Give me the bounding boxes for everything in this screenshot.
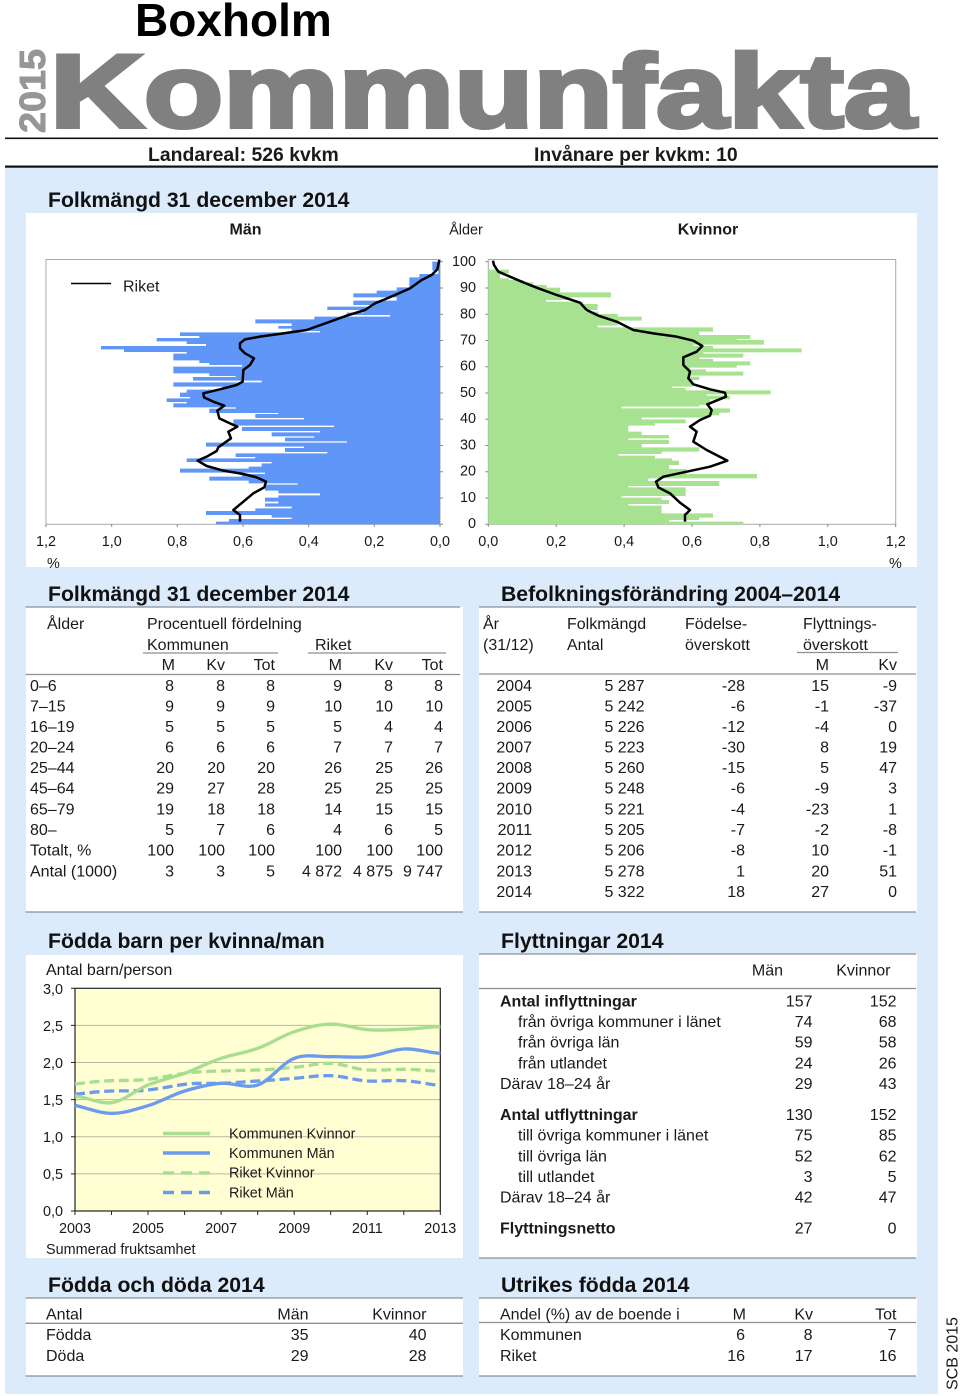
- table rows: -30: [722, 740, 745, 756]
- legend: Riket Kvinnor: [229, 1166, 315, 1182]
- panel: foreign born table: 6: [736, 1327, 745, 1344]
- age axis labels: 80: [460, 306, 476, 322]
- table rows: 4 875: [353, 864, 393, 880]
- table header: Födelse-: [685, 616, 747, 633]
- y axis labels: 1,0: [43, 1130, 63, 1146]
- table header: (31/12): [483, 637, 534, 654]
- chart: women bars: [485, 260, 896, 527]
- x axis labels: 2005: [132, 1221, 164, 1237]
- moves out: Antal utflyttningar: [500, 1107, 638, 1124]
- moves in: 152: [870, 994, 897, 1010]
- moves in: 43: [879, 1076, 897, 1093]
- header rule bottom: [5, 166, 938, 168]
- women axis labels: 0,8: [750, 534, 770, 550]
- moves in: från utlandet: [518, 1054, 608, 1072]
- table rows: 7: [434, 740, 443, 756]
- x axis labels: 2007: [205, 1221, 237, 1237]
- table header: [47, 614, 444, 674]
- moves in: 24: [795, 1056, 813, 1072]
- moves out: 75: [795, 1128, 813, 1144]
- table rows: -12: [722, 719, 745, 736]
- panel: population change table: [479, 607, 917, 912]
- heading: births and deaths: Födda och döda 2014: [48, 1274, 265, 1297]
- table rows: 8: [384, 678, 393, 695]
- table rows: 4 872: [302, 864, 342, 880]
- table rows: 5: [820, 760, 829, 777]
- legend: Kommunen Kvinnor: [229, 1126, 356, 1142]
- table rows: 5: [434, 822, 443, 839]
- women axis labels: 0,0: [478, 534, 498, 550]
- table rows: -9: [883, 678, 897, 695]
- table rows: 5 278: [604, 864, 645, 880]
- panel: births and deaths table: Män: [277, 1306, 308, 1324]
- x axis labels: 2003: [59, 1221, 91, 1237]
- table rows: -28: [722, 678, 745, 695]
- women axis labels: 0,2: [546, 534, 566, 550]
- panel: foreign born table: Riket: [500, 1348, 537, 1365]
- moves in: 59: [795, 1034, 813, 1052]
- legend: Riket Män: [229, 1186, 294, 1202]
- women axis labels: 1,0: [818, 534, 838, 550]
- table rows: 4: [384, 719, 393, 736]
- table header: Riket: [315, 637, 352, 654]
- line: national male profile: [198, 260, 439, 522]
- table header: Kv: [206, 657, 225, 674]
- table rows: 0: [888, 719, 897, 736]
- age axis labels: 50: [460, 385, 476, 401]
- moves out: 42: [795, 1190, 813, 1206]
- moves out: 5: [888, 1169, 897, 1186]
- table rows: 3: [888, 780, 897, 798]
- table rows: 51: [879, 864, 897, 880]
- y axis labels: [43, 982, 63, 1220]
- y axis labels: 3,0: [43, 982, 63, 998]
- table rows: 80–: [30, 822, 57, 839]
- table header: överskott: [685, 637, 750, 654]
- table rows: 25: [375, 780, 393, 798]
- moves out: till övriga kommuner i länet: [518, 1128, 709, 1144]
- heading: foreign born: Utrikes födda 2014: [501, 1274, 690, 1297]
- y axis labels: 0,0: [43, 1204, 63, 1220]
- table rows: 18: [727, 884, 745, 901]
- y axis labels: 2,0: [43, 1056, 63, 1072]
- table rows: 7: [384, 740, 393, 756]
- table rows: 2009: [496, 780, 532, 798]
- table rows: 19: [156, 802, 174, 818]
- x axis labels: [59, 1221, 456, 1237]
- table rows: 9: [266, 698, 275, 716]
- moves out: Därav 18–24 år: [500, 1188, 611, 1206]
- table rows: 5: [266, 864, 275, 880]
- table rows: 5: [266, 719, 275, 736]
- table rows: 5: [165, 719, 174, 736]
- legend: Kommunen Män: [229, 1146, 335, 1162]
- heading: fertility: Födda barn per kvinna/man: [48, 930, 325, 953]
- table rows: 100: [366, 842, 393, 860]
- table rows: 18: [207, 802, 225, 818]
- panel: age distribution table: [26, 607, 463, 912]
- table rows: 100: [248, 842, 275, 860]
- panel: births and deaths table: 28: [409, 1348, 427, 1365]
- table rows: 27: [207, 780, 225, 798]
- table rows: 6: [165, 740, 174, 756]
- table rows: 14: [324, 802, 342, 818]
- table header: Kommunen: [147, 637, 229, 654]
- legend: Riket: [71, 278, 160, 296]
- age axis labels: 20: [460, 464, 476, 480]
- table header: M: [162, 657, 175, 674]
- table rows: 10: [811, 842, 829, 860]
- table rows: [496, 678, 897, 901]
- table rows: 2013: [496, 864, 532, 880]
- table rows: 5 226: [604, 719, 645, 736]
- table rows: -1: [883, 842, 897, 860]
- table header: Kv: [878, 657, 897, 674]
- panel: births and deaths table: Födda: [46, 1327, 91, 1344]
- women axis labels: 1,2: [886, 534, 906, 550]
- table rows: 8: [266, 678, 275, 695]
- table rows: 3: [165, 864, 174, 880]
- women axis labels: [478, 534, 906, 572]
- moves out: till utlandet: [518, 1169, 595, 1186]
- table rows: 20: [811, 864, 829, 880]
- men axis labels: 0,6: [233, 534, 253, 550]
- table rows: 8: [820, 740, 829, 756]
- table header: Tot: [254, 657, 276, 674]
- panel: foreign born table: 16: [727, 1348, 745, 1365]
- land area: Landareal: 526 kvkm: [148, 144, 339, 166]
- table rows: 6: [266, 740, 275, 756]
- age axis labels: 60: [460, 358, 476, 374]
- axis title: Antal barn/person: [46, 962, 172, 979]
- moves out: 62: [879, 1148, 897, 1166]
- table rows: 25: [425, 780, 443, 798]
- moves in: 74: [795, 1014, 813, 1031]
- moves out: till övriga län: [518, 1148, 607, 1166]
- table rows: [30, 678, 443, 880]
- moves in: Därav 18–24 år: [500, 1075, 611, 1093]
- series: Kommunen Män: [75, 1049, 440, 1113]
- chart: men bars: [46, 260, 443, 527]
- table rows: 26: [425, 760, 443, 777]
- x axis labels: 2013: [424, 1221, 456, 1237]
- moves in: 68: [879, 1014, 897, 1031]
- panel: births and deaths table: 40: [409, 1327, 427, 1344]
- table rows: 7: [333, 740, 342, 756]
- table rows: 10: [375, 698, 393, 716]
- table rows: 6: [384, 822, 393, 839]
- moves in: från övriga kommuner i länet: [518, 1013, 721, 1031]
- net migration: Flyttningsnetto: [500, 1220, 616, 1238]
- moves in: 157: [786, 994, 813, 1010]
- table rows: 28: [257, 780, 275, 798]
- heading: migration: Flyttningar 2014: [501, 930, 664, 953]
- table rows: 9 747: [403, 864, 443, 880]
- panel: foreign born table: 8: [804, 1327, 813, 1344]
- legend: [163, 1126, 356, 1202]
- table rows: 8: [165, 678, 174, 695]
- table rows: 15: [811, 678, 829, 695]
- table rows: 100: [198, 842, 225, 860]
- table rows: 10: [324, 698, 342, 716]
- table rows: 5 205: [604, 822, 645, 839]
- table rows: 2007: [496, 740, 532, 756]
- moves out: [500, 1107, 897, 1206]
- table rows: 5 260: [604, 760, 645, 777]
- men axis labels: [36, 534, 450, 572]
- table header: Ålder: [47, 614, 85, 633]
- series: Kommunen Kvinnor: [75, 1024, 440, 1103]
- men axis labels: %: [47, 556, 60, 572]
- y axis labels: 1,5: [43, 1093, 63, 1109]
- table rows: 100: [315, 842, 342, 860]
- table rows: -6: [731, 780, 745, 798]
- age axis labels: 10: [460, 490, 476, 506]
- moves in: från övriga län: [518, 1034, 619, 1052]
- table rows: 6: [266, 822, 275, 839]
- table rows: 100: [416, 842, 443, 860]
- table rows: 16–19: [30, 719, 75, 736]
- table rows: -1: [815, 698, 829, 716]
- table rows: 45–64: [30, 780, 75, 798]
- table rows: 20: [207, 760, 225, 777]
- panel: foreign born table: Andel (%) av de boende i: [500, 1306, 680, 1324]
- table rows: 5 223: [604, 740, 645, 756]
- table header: År: [483, 614, 500, 633]
- net migration: 0: [888, 1220, 897, 1238]
- men axis labels: 0,2: [364, 534, 384, 550]
- plot area: [71, 988, 440, 1215]
- panel: foreign born table: M: [733, 1306, 746, 1324]
- table rows: 29: [156, 780, 174, 798]
- panel: births and deaths table: Antal: [46, 1306, 82, 1324]
- table header: Procentuell fördelning: [147, 616, 302, 633]
- moves out: 52: [795, 1148, 813, 1166]
- moves in: 29: [795, 1076, 813, 1093]
- men axis labels: 0,0: [430, 534, 450, 550]
- series: Riket Kvinnor: [75, 1063, 436, 1084]
- table rows: 5 242: [604, 698, 645, 716]
- table rows: 9: [165, 698, 174, 716]
- table rows: 15: [425, 802, 443, 818]
- table rows: 5 221: [604, 802, 645, 818]
- women axis labels: %: [889, 556, 902, 572]
- table header: [752, 962, 891, 980]
- heading: population pyramid: Folkmängd 31 december 2014: [48, 189, 350, 212]
- logo: year 2015: 2015: [12, 49, 53, 133]
- moves in: Antal inflyttningar: [500, 994, 637, 1010]
- table rows: 5 287: [604, 678, 645, 695]
- net migration: [500, 1220, 897, 1238]
- table rows: 4: [333, 822, 342, 839]
- panel: births and deaths table: 35: [291, 1327, 309, 1344]
- table header: M: [816, 657, 829, 674]
- table header: Folkmängd: [567, 616, 646, 633]
- table rows: 1: [888, 802, 897, 818]
- moves out: 3: [804, 1169, 813, 1186]
- panel: births and deaths table: Kvinnor: [372, 1306, 427, 1324]
- table rows: 25–44: [30, 760, 75, 777]
- age axis labels: 40: [460, 411, 476, 427]
- table rows: 5 322: [604, 884, 645, 901]
- moves out: 85: [879, 1128, 897, 1144]
- moves out: 130: [786, 1107, 813, 1124]
- panel: foreign born table: 16: [879, 1348, 897, 1365]
- table header: Antal: [567, 637, 603, 654]
- table rows: Antal (1000): [30, 864, 117, 880]
- age axis labels: 90: [460, 280, 476, 296]
- table rows: 7: [216, 822, 225, 839]
- table rows: 20: [156, 760, 174, 777]
- table header: M: [329, 657, 342, 674]
- table rows: 47: [879, 760, 897, 777]
- table rows: 8: [216, 678, 225, 695]
- table rows: 2012: [496, 842, 532, 860]
- line: national female profile: [493, 261, 727, 522]
- panel: migration table: [479, 954, 917, 1258]
- table rows: -8: [731, 842, 745, 860]
- column label: men: Män: [230, 222, 262, 238]
- y axis labels: 0,5: [43, 1167, 63, 1183]
- table rows: 25: [375, 760, 393, 777]
- table rows: -4: [731, 802, 745, 818]
- men axis labels: 1,0: [102, 534, 122, 550]
- table rows: 2006: [496, 719, 532, 736]
- table rows: -23: [806, 802, 829, 818]
- x axis labels: 2011: [352, 1221, 383, 1237]
- moves out: 47: [879, 1190, 897, 1206]
- panel: foreign born table: 17: [795, 1348, 813, 1365]
- table rows: 2010: [496, 802, 532, 818]
- table rows: 2014: [496, 884, 532, 901]
- table rows: -9: [815, 780, 829, 798]
- table rows: -2: [815, 822, 829, 839]
- table rows: 5: [333, 719, 342, 736]
- men axis labels: 0,8: [167, 534, 187, 550]
- table header: Flyttnings-: [803, 616, 877, 633]
- age axis labels: 100: [452, 254, 476, 270]
- table rows: 2005: [496, 698, 532, 716]
- table header: Tot: [422, 657, 444, 674]
- heading: population change: Befolkningsförändring 2004–2014: [501, 583, 840, 606]
- table rows: 2004: [496, 678, 532, 695]
- age axis labels: 70: [460, 332, 476, 348]
- logo: Kommunfakta: Kommunfakta: [50, 34, 917, 150]
- panel: births and deaths table: [26, 1298, 463, 1376]
- column label: age: Ålder: [449, 222, 483, 238]
- panel: births and deaths table: 29: [291, 1348, 309, 1365]
- panel: foreign born table: Kommunen: [500, 1327, 582, 1344]
- table rows: -6: [731, 698, 745, 716]
- header rule top: [5, 138, 938, 139]
- panel: foreign born table: Kv: [794, 1306, 813, 1324]
- table rows: 0: [888, 884, 897, 901]
- table rows: 5 248: [604, 780, 645, 798]
- legend: Riket: Riket: [123, 278, 160, 296]
- table rows: 7–15: [30, 698, 66, 716]
- table rows: 9: [333, 678, 342, 695]
- table rows: 100: [147, 842, 174, 860]
- men axis labels: 0,4: [299, 534, 319, 550]
- panel: population pyramid: [26, 213, 917, 572]
- table rows: -15: [722, 760, 745, 777]
- table rows: 10: [425, 698, 443, 716]
- women axis labels: 0,4: [614, 534, 634, 550]
- moves in: 58: [879, 1034, 897, 1052]
- table rows: 2011: [498, 822, 532, 839]
- age axis labels: [452, 254, 476, 532]
- table header: [483, 614, 897, 674]
- table rows: 5 206: [604, 842, 645, 860]
- panel: foreign born table: Tot: [875, 1306, 897, 1324]
- net migration: 27: [795, 1220, 813, 1238]
- table rows: 26: [324, 760, 342, 777]
- table rows: -7: [731, 822, 745, 839]
- table rows: 20: [257, 760, 275, 777]
- inhabitants per sq km: Invånare per kvkm: 10: [534, 143, 738, 166]
- panel: births and deaths table: Döda: [46, 1348, 84, 1365]
- table header: överskott: [803, 637, 868, 654]
- table rows: -8: [883, 822, 897, 839]
- column label: women: Kvinnor: [678, 222, 738, 238]
- women axis labels: 0,6: [682, 534, 702, 550]
- table rows: 4: [434, 719, 443, 736]
- table rows: 5: [216, 719, 225, 736]
- moves in: 26: [879, 1056, 897, 1072]
- table rows: -37: [874, 698, 897, 716]
- table rows: 20–24: [30, 740, 75, 756]
- age axis labels: 30: [460, 438, 476, 454]
- table rows: 8: [434, 678, 443, 695]
- heading: age distribution: Folkmängd 31 december 2014: [48, 583, 350, 606]
- table rows: 3: [216, 864, 225, 880]
- table rows: 5: [165, 822, 174, 839]
- table rows: 2008: [496, 760, 532, 777]
- panel: foreign born table: [479, 1298, 917, 1376]
- age axis labels: 0: [468, 516, 476, 532]
- panel: fertility chart: [26, 955, 463, 1258]
- series lines: [75, 1024, 440, 1113]
- table rows: 9: [216, 698, 225, 716]
- men axis labels: 1,2: [36, 534, 56, 550]
- axis caption: Summerad fruktsamhet: [46, 1242, 196, 1258]
- y axis labels: 2,5: [43, 1019, 63, 1035]
- table rows: 19: [879, 740, 897, 756]
- table rows: 27: [811, 884, 829, 901]
- table header: Kv: [374, 657, 393, 674]
- table rows: 0–6: [30, 678, 57, 695]
- panel: foreign born table: 7: [888, 1327, 897, 1344]
- table header: Män: [752, 962, 783, 980]
- table rows: 25: [324, 780, 342, 798]
- series: Riket Män: [75, 1076, 436, 1094]
- table rows: 18: [257, 802, 275, 818]
- table rows: 15: [375, 802, 393, 818]
- table header: Kvinnor: [836, 962, 891, 980]
- table rows: 65–79: [30, 802, 75, 818]
- table rows: 1: [736, 864, 745, 880]
- x axis labels: 2009: [278, 1221, 310, 1237]
- table rows: 6: [216, 740, 225, 756]
- table rows: Totalt, %: [30, 842, 91, 860]
- moves out: 152: [870, 1107, 897, 1124]
- table rows: -4: [815, 719, 829, 736]
- moves in: [500, 994, 897, 1093]
